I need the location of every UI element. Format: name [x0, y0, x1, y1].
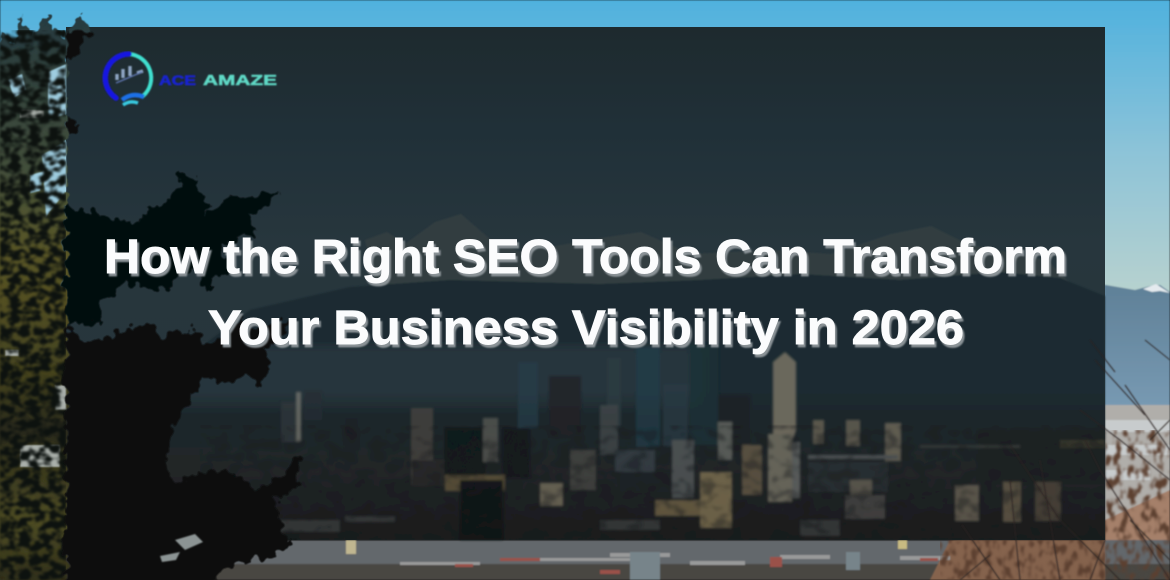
logo: Ace Amaze: AMAZE	[203, 73, 277, 89]
skyline and mountains seen through the panel	[70, 214, 1105, 540]
title: How the Right SEO Tools Can Transform	[106, 234, 1069, 287]
tree needle texture	[0, 30, 66, 580]
logo wordmark: ACE	[159, 72, 196, 88]
skyline towers	[270, 345, 1105, 540]
title	[104, 231, 1069, 358]
branch needle highlights at bottom	[160, 534, 203, 562]
city grit texture	[200, 425, 1105, 540]
title: Your Business Visibility in 2026	[208, 302, 964, 355]
title: How the Right SEO Tools Can Transform	[104, 231, 1067, 284]
left evergreen tree	[0, 14, 92, 580]
dark panel	[66, 27, 1105, 540]
lower strip twig texture	[940, 540, 1105, 580]
right foreground twig texture	[1105, 430, 1170, 580]
logo ring icon	[105, 54, 151, 105]
bare winter branches at right	[960, 340, 1170, 580]
logo: Ace Amaze	[105, 54, 277, 105]
title: Your Business Visibility in 2026	[210, 305, 966, 358]
tree branches over the panel	[66, 30, 302, 580]
